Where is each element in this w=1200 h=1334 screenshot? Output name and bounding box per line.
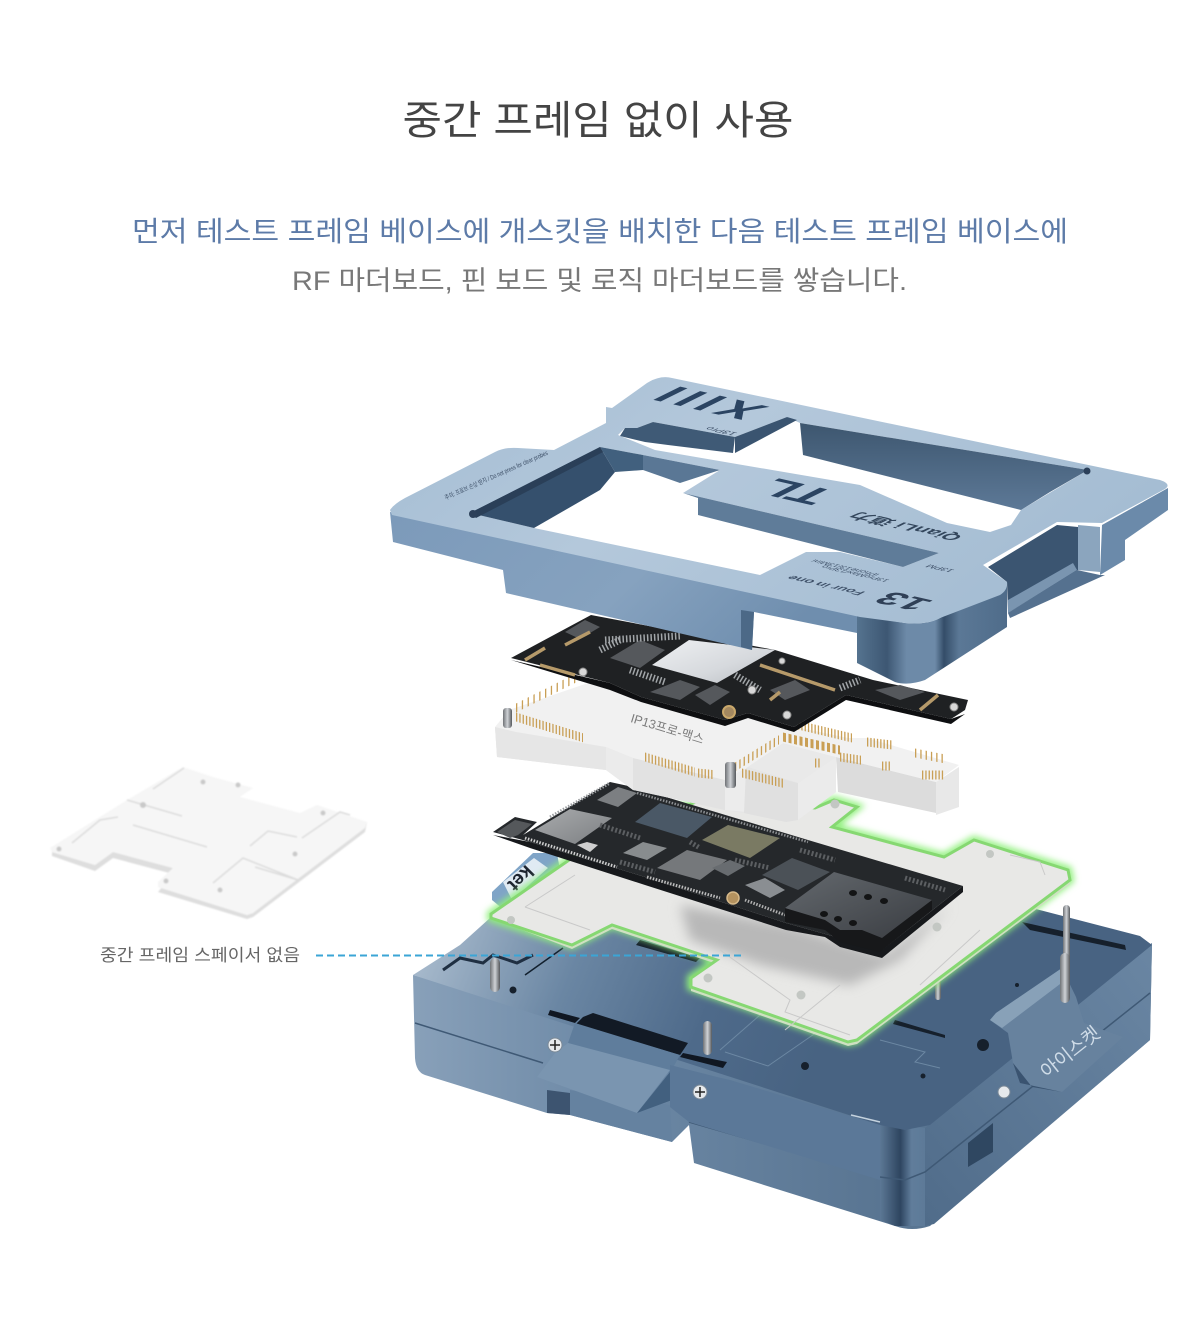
socket tab label: ket bbox=[503, 860, 537, 895]
frame front side bbox=[390, 512, 870, 650]
four in one text bbox=[443, 425, 957, 597]
frame top surface bbox=[390, 377, 1168, 623]
screws bbox=[548, 1038, 1010, 1099]
description text bbox=[132, 216, 1068, 296]
base right side bbox=[925, 943, 1152, 1226]
socket tab label bbox=[492, 853, 560, 915]
four in one text: 13ProMax/13Pro bbox=[819, 564, 892, 583]
silver shield bbox=[652, 640, 775, 683]
slots and holes bbox=[510, 922, 1126, 1078]
gasket plate with green outline bbox=[491, 800, 1070, 1046]
guide pins bbox=[490, 905, 1070, 1055]
main window bbox=[469, 447, 939, 575]
spacer label: 중간 프레임 스페이서 없음 bbox=[100, 946, 300, 965]
base rounded corner bbox=[880, 1122, 925, 1226]
pin board bbox=[495, 676, 959, 822]
four in one text: 13Pro bbox=[703, 425, 740, 436]
engraved logo TL: TL bbox=[743, 474, 848, 509]
description text: 먼저 테스트 프레임 베이스에 개스킷을 배치한 다음 테스트 프레임 베이스에 bbox=[132, 216, 1068, 247]
base front side bbox=[413, 943, 1152, 1229]
four in one text: Four in one bbox=[782, 574, 868, 597]
gold pins bbox=[516, 676, 945, 783]
board pins bbox=[503, 708, 512, 728]
RF board bbox=[511, 615, 968, 732]
right window bbox=[618, 417, 1090, 532]
four in one text: iPhone13/13Mini bbox=[809, 558, 882, 577]
board front faces bbox=[495, 726, 836, 822]
right clasp bbox=[990, 968, 1123, 1092]
base top surface bbox=[413, 908, 1152, 1130]
model number 13: 13 bbox=[865, 588, 942, 614]
left clasp bbox=[537, 1010, 880, 1180]
green glow bbox=[491, 800, 1070, 1042]
title: 중간 프레임 없이 사용 bbox=[402, 99, 794, 143]
logic board bbox=[493, 782, 963, 958]
four in one text: 13PM bbox=[923, 563, 957, 573]
side window bbox=[968, 1123, 993, 1167]
engraved logo XIII: XIII bbox=[637, 380, 779, 424]
top test frame bbox=[390, 377, 1168, 684]
board label: IP13프로-맥스 bbox=[629, 711, 706, 747]
description text: RF 마더보드, 핀 보드 및 로직 마더보드를 쌓습니다. bbox=[292, 266, 907, 296]
chips bbox=[535, 787, 830, 898]
dashed leader line bbox=[316, 954, 745, 956]
clasp label: 아이스켓 bbox=[1036, 1022, 1105, 1083]
left spacer plate bbox=[50, 767, 367, 919]
test frame base bbox=[413, 905, 1152, 1229]
board top surface bbox=[495, 682, 959, 782]
right side opening bbox=[988, 525, 1078, 613]
frame leg bbox=[857, 582, 1007, 684]
frame brand text: QianLi 道力 bbox=[843, 510, 967, 543]
SIM shield bbox=[785, 872, 932, 952]
plate shadow bbox=[680, 905, 950, 985]
four in one text: 주의: 프로브 손상 방지 / Do not press for clear probes bbox=[443, 448, 550, 502]
plate details bbox=[525, 855, 1045, 1035]
